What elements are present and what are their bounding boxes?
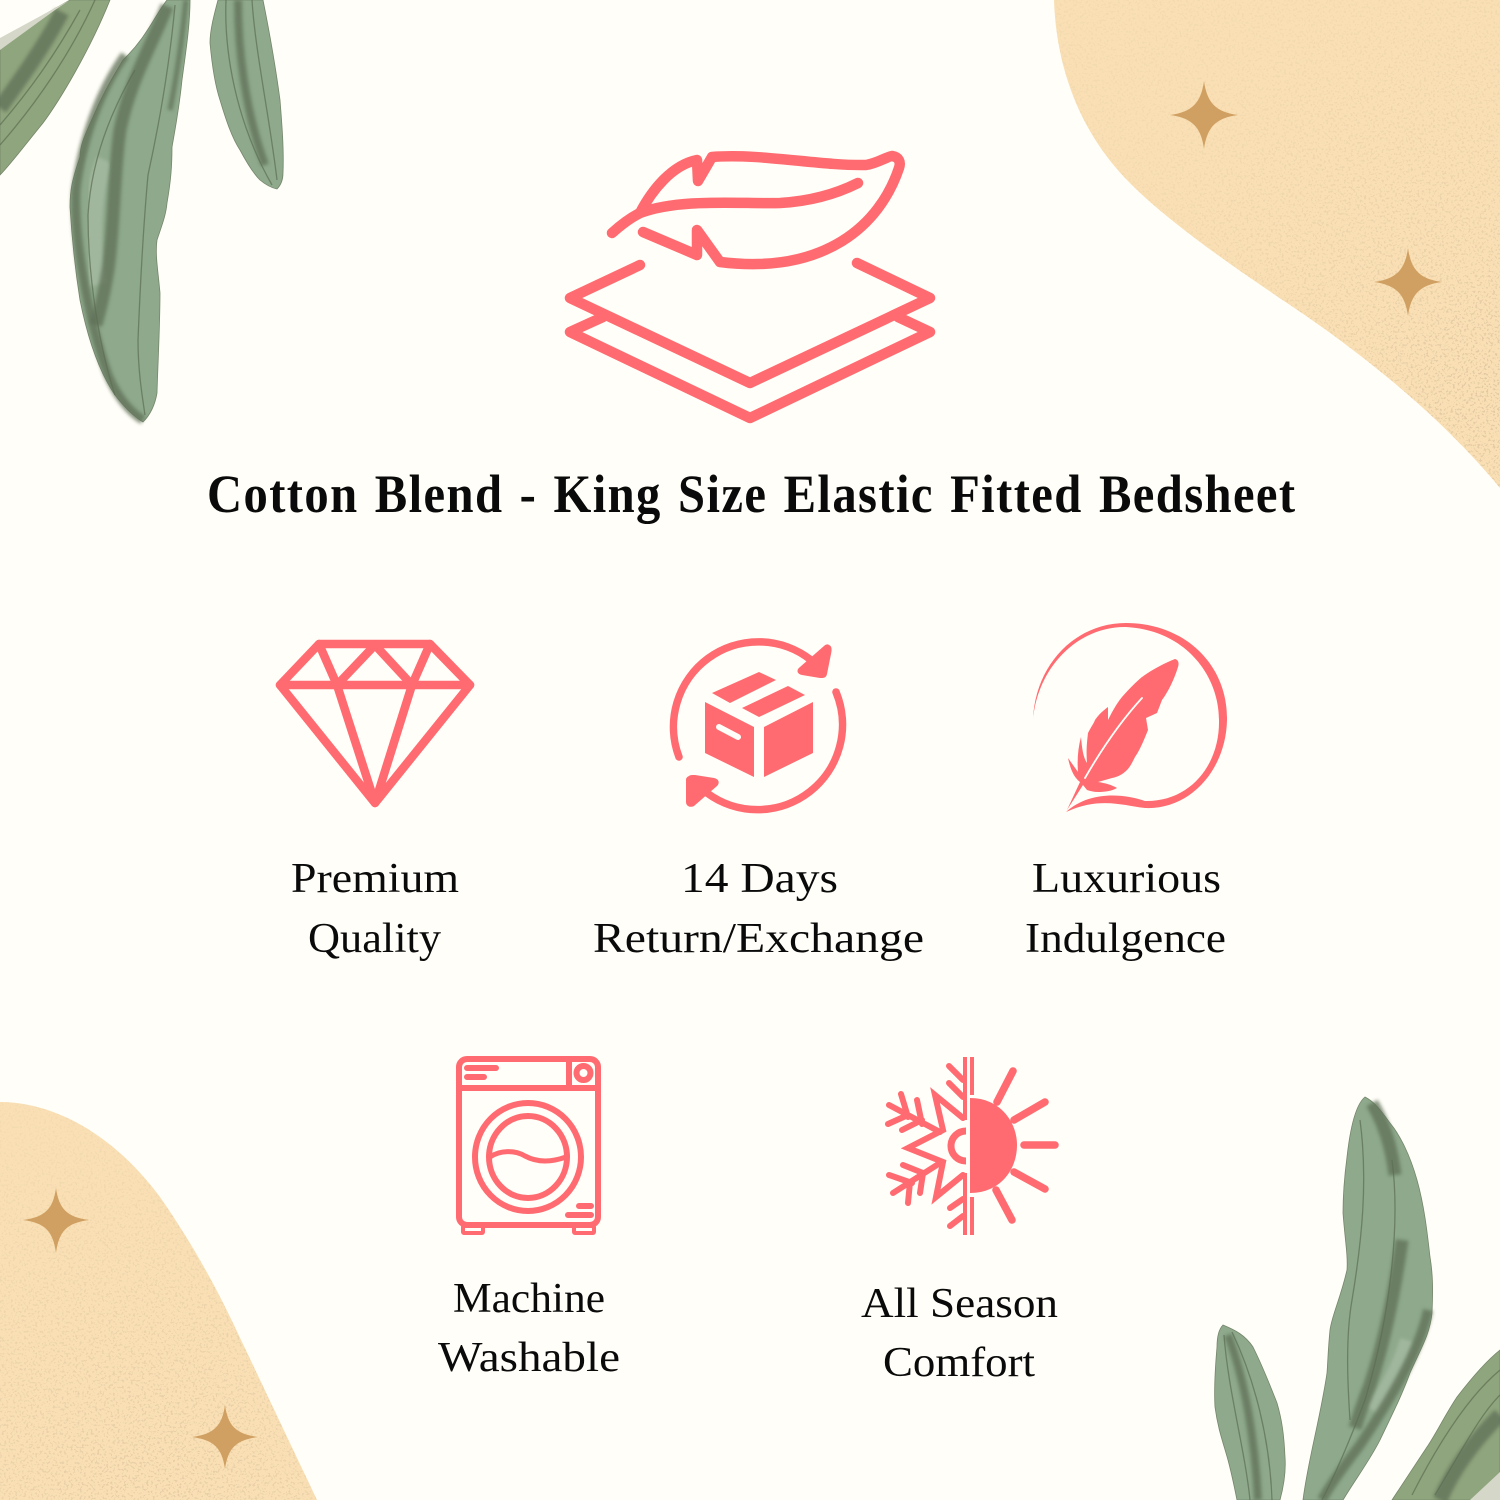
sparkle: bottom left upper <box>23 1188 89 1253</box>
icon: diamond <box>280 644 470 803</box>
sparkle: top right upper <box>1170 81 1238 149</box>
icon: feather in circle <box>1033 623 1227 812</box>
icon: washing machine <box>459 1059 598 1233</box>
leaves: bottom right <box>1215 1097 1500 1500</box>
label: Premium Quality: Premium <box>291 856 459 902</box>
icon: box with return arrows <box>673 642 843 810</box>
label: All Season Comfort: Comfort <box>883 1340 1035 1386</box>
leaves: top left <box>0 0 283 422</box>
icon: feather over layered sheets <box>570 156 930 418</box>
layered sheets <box>570 263 930 418</box>
label: 14 Days Return/Exchange: Return/Exchange <box>593 916 924 962</box>
icon: snowflake and sun <box>888 1057 1055 1235</box>
feather <box>612 156 900 264</box>
label: Machine Washable <box>438 1276 620 1381</box>
title: Cotton Blend - King Size Elastic Fitted Bedsheet <box>207 465 1295 525</box>
label: 14 Days Return/Exchange <box>593 856 924 962</box>
sparkle: bottom left lower <box>192 1405 258 1469</box>
label: All Season Comfort: All Season <box>861 1281 1058 1327</box>
label: Luxurious Indulgence: Luxurious <box>1032 856 1221 902</box>
label: Luxurious Indulgence: Indulgence <box>1025 916 1226 962</box>
sparkle: top right lower <box>1374 248 1442 316</box>
label: Premium Quality: Quality <box>308 916 441 962</box>
label: All Season Comfort <box>861 1281 1058 1386</box>
decorative blob: bottom left <box>0 1100 320 1500</box>
label: Premium Quality <box>291 856 459 962</box>
label: Machine Washable: Washable <box>438 1335 620 1381</box>
label: 14 Days Return/Exchange: 14 Days <box>681 856 838 902</box>
label: Luxurious Indulgence <box>1025 856 1226 962</box>
decorative blob: top right <box>1050 0 1500 490</box>
label: Machine Washable: Machine <box>453 1276 605 1322</box>
